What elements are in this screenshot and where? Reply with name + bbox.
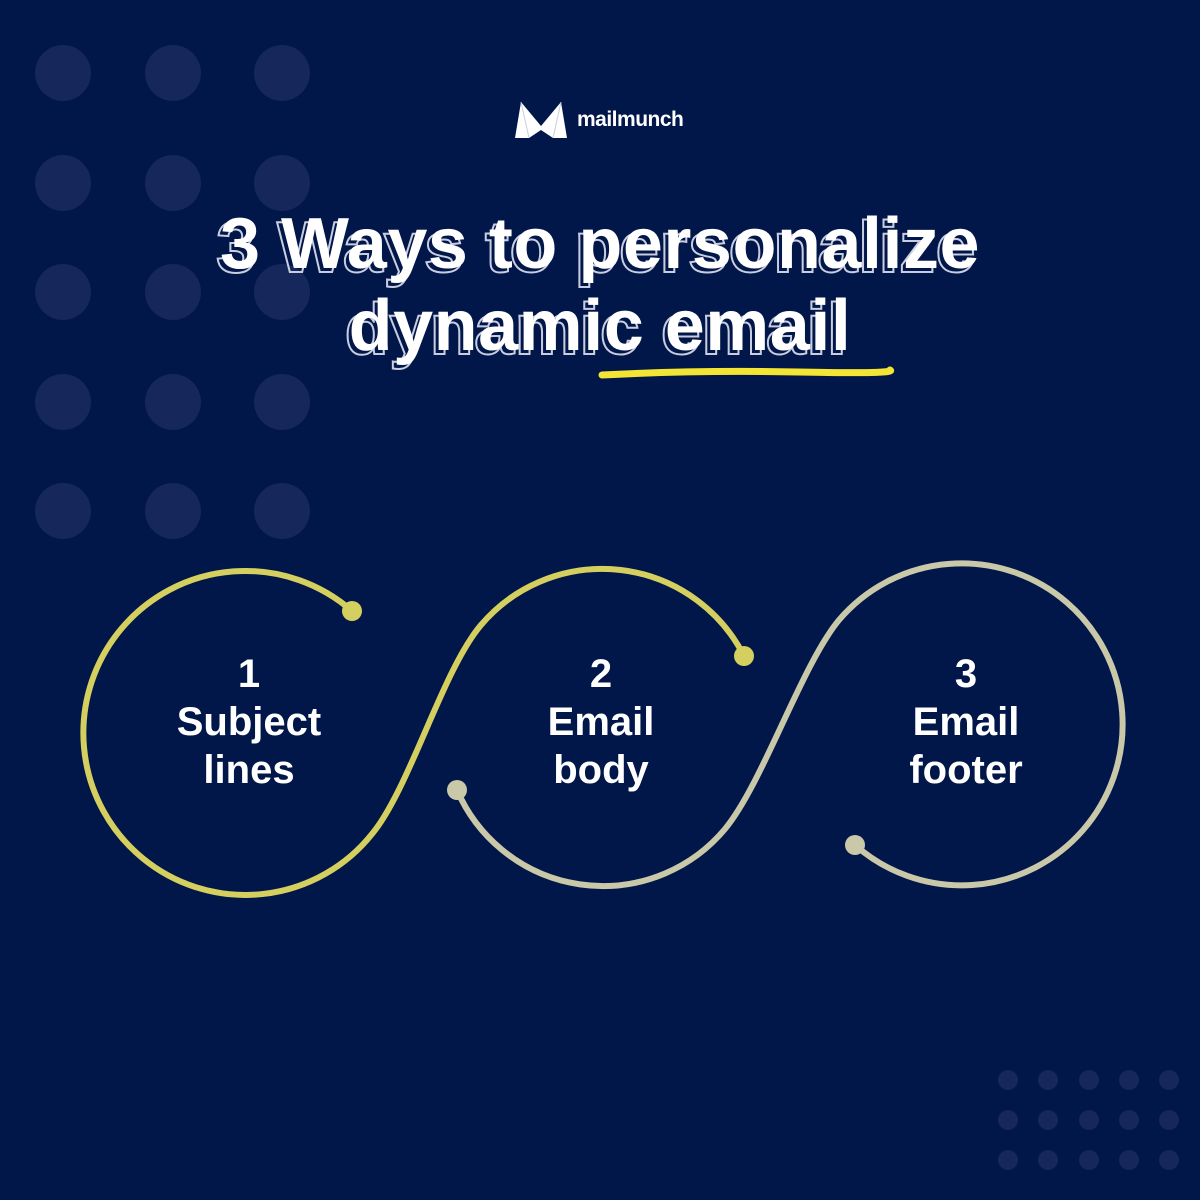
title: dynamic email: [349, 286, 851, 366]
title: [216, 204, 980, 370]
label 2: Email: [548, 700, 654, 744]
title: 3 Ways to personalize: [220, 204, 980, 284]
logo: mailmunch: [577, 108, 683, 131]
label 1: [177, 652, 321, 792]
label 3: Email: [913, 700, 1019, 744]
logo: [515, 102, 683, 138]
label 1: lines: [203, 748, 295, 792]
yellow underline: [598, 366, 894, 378]
label 3: 3: [955, 652, 977, 696]
label 1: Subject: [177, 700, 321, 744]
icon: mailmunch M: [515, 102, 567, 138]
label 2: body: [553, 748, 649, 792]
label 2: 2: [590, 652, 612, 696]
label 2: [548, 652, 654, 792]
label 3: footer: [909, 748, 1023, 792]
label 3: [909, 652, 1023, 792]
label 1: 1: [238, 652, 260, 696]
